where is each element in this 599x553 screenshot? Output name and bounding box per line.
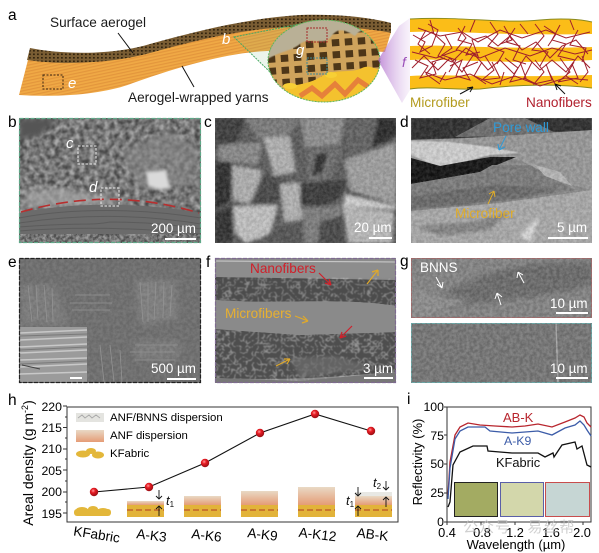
label c: c	[204, 114, 212, 131]
zoom guide lines	[234, 24, 300, 73]
schematic: AB-K	[355, 492, 392, 517]
label microfiber: Microfiber	[455, 206, 515, 221]
thickness arrows and labels	[156, 475, 389, 516]
x axis labels: A-K9	[247, 525, 278, 544]
thickness arrows and labels: 1	[350, 500, 355, 509]
pointer yarns	[182, 66, 194, 87]
curve AB-K	[448, 415, 591, 495]
y axis ticks: 195	[41, 507, 62, 521]
x axis labels: AB-K	[356, 525, 389, 544]
legend	[76, 412, 223, 460]
x axis title: Wavelength (µm)	[467, 537, 565, 552]
scale bar d: 5 µm	[557, 220, 587, 235]
data points	[90, 410, 375, 496]
x axis labels: A-K6	[191, 526, 222, 545]
dashed box d	[101, 188, 119, 206]
thickness arrows and labels: t	[346, 493, 350, 508]
micrograph without BNNS	[411, 323, 592, 383]
x ticks: 1.6	[542, 525, 560, 540]
y ticks: 25	[430, 486, 444, 500]
label A-K9: A-K9	[504, 434, 531, 448]
x axis labels: KFabric	[72, 523, 121, 546]
y ticks: 0	[437, 515, 444, 529]
label microfibers: Microfibers	[225, 306, 292, 321]
curve A-K9	[448, 421, 591, 499]
sample photos	[454, 482, 590, 516]
arrow to microfiber	[460, 87, 473, 94]
label e: e	[8, 254, 17, 271]
arrow microfibers	[295, 316, 308, 323]
watermark: 公众号 · 易丝帮	[463, 519, 575, 536]
y axis ticks: 210	[41, 442, 62, 456]
frame	[447, 407, 591, 522]
y ticks: 75	[430, 429, 444, 443]
dashed box c	[78, 146, 96, 164]
y axis ticks	[41, 400, 62, 521]
plot frame	[67, 407, 398, 522]
label nanofibers: Nanofibers	[526, 95, 592, 110]
label c: c	[66, 135, 74, 152]
label f: f	[206, 254, 211, 271]
purple projection	[378, 18, 410, 103]
x ticks: 1.2	[506, 525, 524, 540]
label b: b	[8, 114, 17, 131]
x ticks: 0.4	[438, 525, 456, 540]
frame f	[216, 258, 396, 382]
schematic: A-K6	[184, 496, 221, 517]
y ticks: 50	[430, 457, 444, 471]
x axis labels: A-K3	[136, 526, 167, 545]
x ticks: 0.8	[473, 525, 491, 540]
scale bar c: 20 µm	[354, 220, 392, 235]
red dashed boundary	[21, 199, 199, 213]
micrograph with BNNS	[411, 258, 592, 318]
arrow up right	[367, 270, 378, 284]
schematic: KFabric	[74, 506, 111, 516]
y axis ticks: 220	[41, 400, 62, 414]
inset micrograph	[20, 327, 87, 382]
y axis ticks: 215	[41, 421, 62, 435]
label surface aerogel: Surface aerogel	[50, 15, 146, 30]
thickness arrows and labels: t	[166, 493, 170, 508]
schematic: A-K3	[127, 501, 164, 517]
label b: b	[222, 31, 230, 48]
curve KFabric	[448, 442, 591, 507]
panel e: SEM fabric surface	[8, 254, 201, 383]
pointer surface aerogel	[118, 33, 133, 53]
label h: h	[8, 392, 17, 409]
y ticks: 100	[423, 400, 444, 414]
label nanofibers: Nanofibers	[250, 261, 316, 276]
schematic: A-K12	[298, 487, 335, 517]
label d: d	[400, 114, 409, 131]
micrograph with BNNS: BNNS	[420, 260, 458, 275]
label e: e	[68, 75, 76, 92]
thickness arrows and labels: 2	[377, 482, 382, 491]
label aerogel-wrapped yarns: Aerogel-wrapped yarns	[128, 90, 269, 105]
y axis ticks: 205	[41, 464, 62, 478]
label i: i	[407, 391, 410, 408]
label a: a	[8, 7, 17, 24]
label d: d	[89, 179, 98, 196]
arrow lower	[276, 359, 290, 366]
data line	[94, 414, 371, 492]
scale bar b: 200 µm	[151, 221, 196, 236]
g red box	[307, 28, 327, 42]
legend: ANF dispersion	[110, 430, 188, 442]
y axis ticks: 200	[41, 485, 62, 499]
microfiber and nanofiber schematic	[410, 18, 592, 89]
label f: f	[402, 54, 408, 70]
g blue box	[307, 58, 327, 74]
schematic: A-K9	[241, 491, 278, 517]
arrow to nanofibers	[555, 84, 565, 94]
y axis title: Reflectivity (%)	[410, 419, 425, 505]
thickness arrows and labels: 1	[170, 500, 175, 509]
legend: KFabric	[110, 448, 150, 460]
frame b	[20, 118, 200, 242]
panel d: SEM microfiber	[400, 114, 592, 243]
panel i: reflectivity chart	[407, 391, 591, 552]
frame e	[20, 258, 200, 382]
label AB-K: AB-K	[503, 410, 534, 425]
panel f: SEM cross section	[206, 254, 396, 383]
panel a: fabric schematic	[8, 7, 592, 110]
micrograph with BNNS: 10 µm	[550, 296, 588, 311]
label KFabric: KFabric	[496, 455, 541, 470]
y ticks	[423, 400, 444, 529]
scale bar f: 3 µm	[363, 361, 393, 376]
panel c: SEM pores	[204, 114, 396, 243]
ribbon: aerogel-wrapped yarns	[19, 24, 391, 96]
panel b: SEM overview	[8, 114, 201, 243]
y axis title: Areal density (g m-2)	[20, 400, 36, 526]
legend: ANF/BNNS dispersion	[110, 412, 223, 424]
x axis labels	[72, 523, 389, 546]
x axis labels: A-K12	[298, 525, 337, 544]
arrow nanofibers 1	[319, 273, 331, 285]
micrograph without BNNS: 10 µm	[550, 361, 588, 376]
x ticks	[438, 525, 591, 540]
label pore wall: Pore wall	[493, 120, 549, 135]
arrow pore wall	[498, 136, 506, 150]
thickness arrows and labels: t	[373, 475, 377, 490]
x ticks: 2.0	[573, 525, 591, 540]
label g: g	[400, 253, 409, 270]
label microfiber: Microfiber	[410, 95, 470, 110]
scale bar e: 500 µm	[151, 361, 196, 376]
arrow nanofibers 2	[340, 326, 352, 338]
ribbon: surface aerogel layer	[27, 15, 391, 63]
magnifier lens	[266, 18, 382, 104]
panel h: areal density chart	[8, 392, 398, 546]
label g: g	[296, 42, 305, 59]
dashed box e	[43, 75, 63, 89]
arrow microfiber	[488, 191, 495, 204]
panel g: SEM surfaces	[400, 253, 592, 383]
